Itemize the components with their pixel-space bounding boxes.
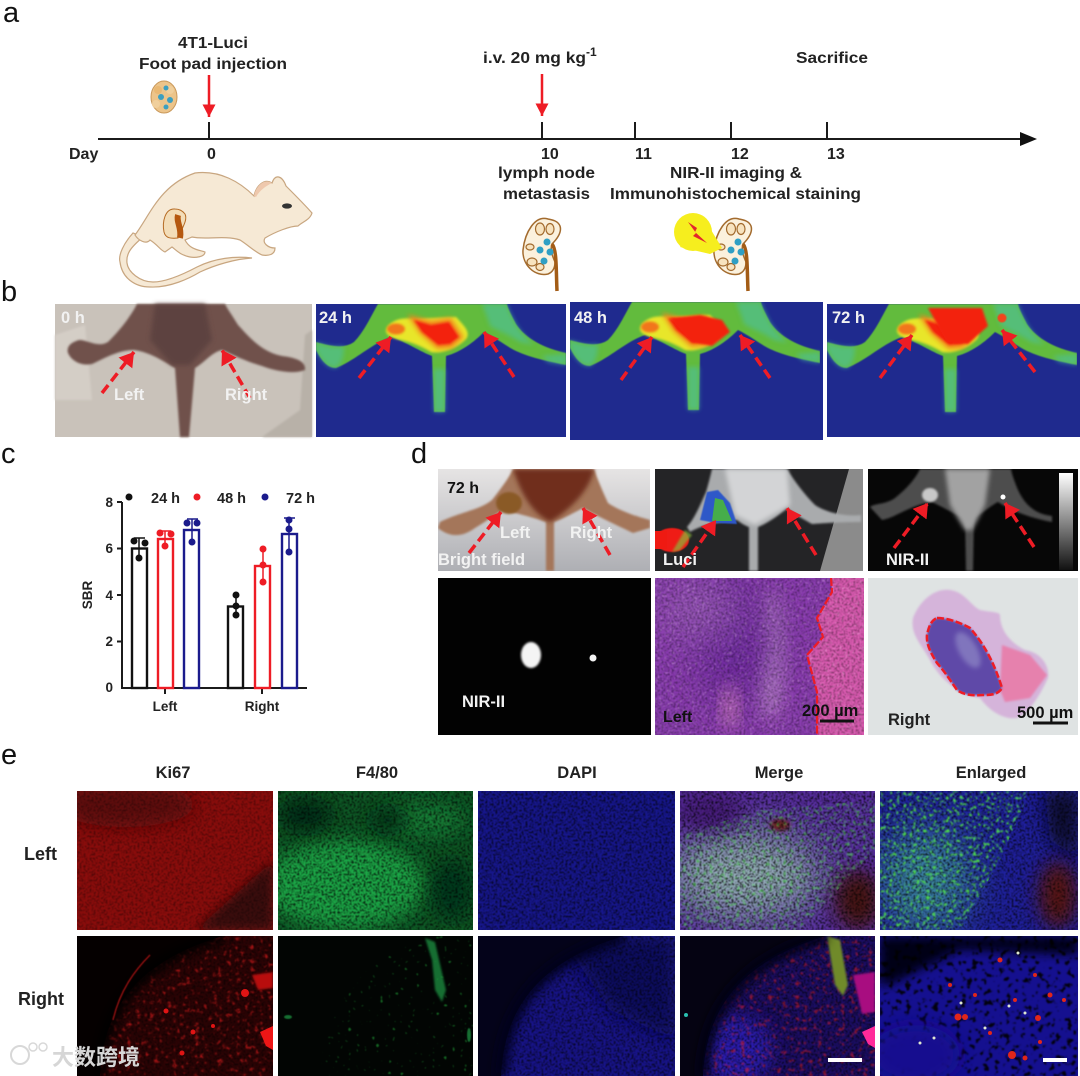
column headings: Enlarged — [956, 764, 1026, 782]
scale bar 200 um: 200 µm — [802, 702, 858, 720]
label: lymph node metastasis: lymph node — [498, 165, 595, 182]
legend: 48 h — [217, 491, 246, 507]
image: NIR-II lower — [438, 578, 651, 735]
image: Right F4/80 — [278, 936, 473, 1076]
watermark — [11, 1043, 140, 1070]
image: Left Enlarged — [880, 791, 1078, 930]
data points — [130, 516, 292, 618]
axis labels: 8 — [105, 495, 113, 510]
watermark: 大数跨境 — [52, 1045, 140, 1070]
panel c: SBR bar chart — [1, 438, 315, 714]
legend: 24 h — [151, 491, 180, 507]
legend — [126, 491, 315, 507]
icon: NIR-II light on lymph node — [674, 213, 752, 291]
NIR-II arrows — [894, 503, 1034, 548]
column headings — [156, 764, 1026, 782]
H&E right label: Right — [888, 711, 931, 729]
label: injection — [139, 35, 287, 73]
image: Left Merge — [670, 791, 882, 930]
NIR-II label: NIR-II — [886, 551, 929, 569]
image: Left DAPI — [478, 791, 675, 930]
day labels: 11 — [635, 146, 652, 163]
24 h arrows — [359, 332, 514, 378]
panel letter b: b — [1, 276, 17, 308]
image: Right Ki67 — [77, 936, 273, 1076]
panel a: experimental timeline — [3, 0, 1037, 291]
0 h arrows — [102, 350, 250, 398]
column headings: F4/80 — [356, 764, 398, 782]
timeline axis — [98, 122, 1037, 146]
scale bar — [828, 1058, 862, 1062]
label: lymph node metastasis — [498, 165, 595, 203]
label: imaging and staining — [610, 165, 861, 203]
axis labels: Left — [153, 699, 178, 714]
label: injection: 4T1-Luci — [178, 35, 248, 52]
label: intravenous dose — [483, 45, 597, 67]
column headings: Ki67 — [156, 764, 190, 782]
label: intravenous dose: -1 — [586, 45, 597, 59]
image: Right Merge — [680, 936, 875, 1076]
image: 24 h thermal map — [316, 304, 566, 437]
panel e: immunofluorescence grid — [1, 739, 1078, 1076]
NIR-II colour scale — [1059, 473, 1073, 570]
axis labels: 0 — [105, 680, 113, 695]
day labels: 10 — [541, 146, 559, 163]
image: 72 h thermal map — [827, 304, 1080, 437]
label: injection: Foot pad injection — [139, 56, 287, 73]
panel letter e: e — [1, 739, 17, 771]
72 h arrows — [880, 330, 1035, 378]
axes — [117, 502, 307, 694]
label: lymph node metastasis: metastasis — [503, 186, 590, 203]
image: Left F4/80 — [265, 791, 473, 930]
bars — [132, 530, 297, 688]
bright field labels: Right — [570, 524, 613, 542]
legend: 72 h — [286, 491, 315, 507]
image: Right DAPI — [478, 936, 675, 1076]
day labels — [69, 146, 845, 163]
column headings: Merge — [755, 764, 803, 782]
image: Right Enlarged — [870, 936, 1078, 1076]
icon: metastatic lymph node — [523, 218, 561, 291]
image: Left Ki67 — [77, 791, 273, 930]
bright field labels: Bright field — [438, 551, 525, 569]
axis labels: Right — [245, 699, 280, 714]
image: 0 h bright field — [55, 304, 312, 437]
bright field arrows — [469, 508, 610, 555]
bright field labels: 72 h — [447, 480, 479, 497]
0 h labels: 0 h — [61, 309, 85, 327]
scale bar — [1043, 1058, 1067, 1062]
icon: mouse — [120, 173, 312, 287]
day labels: Day — [69, 146, 98, 163]
H&E left label: Left — [663, 709, 693, 726]
axis labels: SBR — [80, 581, 95, 609]
icon: tumour cell cluster — [151, 81, 177, 113]
panel d: ex vivo imaging and histology — [411, 438, 1078, 735]
72 h label: 72 h — [832, 309, 865, 327]
image: H&E left — [655, 575, 864, 735]
error bars — [134, 518, 295, 616]
day labels: 12 — [731, 146, 749, 163]
day labels: 0 — [207, 146, 216, 163]
label: imaging and staining: NIR-II imaging & — [670, 165, 802, 182]
bright field labels — [438, 480, 613, 569]
Luci label: Luci — [663, 551, 697, 569]
axis labels: 6 — [105, 541, 113, 556]
axis labels: 2 — [105, 634, 113, 649]
image: bright field 72 h — [438, 469, 650, 571]
0 h labels: Left — [114, 386, 145, 404]
image: NIR-II top — [868, 469, 1078, 571]
image: Luci bioluminescence — [655, 469, 863, 571]
48 h arrows — [621, 335, 770, 380]
panel letter c: c — [1, 438, 16, 470]
24 h label: 24 h — [319, 309, 352, 327]
day labels: 13 — [827, 146, 845, 163]
row heading right: Right — [18, 989, 64, 1009]
panel letter d: d — [411, 438, 427, 470]
injection arrow — [208, 75, 210, 117]
bright field labels: Left — [500, 524, 531, 542]
dose arrow — [541, 74, 543, 116]
0 h labels: Right — [225, 386, 268, 404]
label: sacrifice: Sacrifice — [796, 50, 868, 67]
axis labels — [80, 495, 280, 714]
row heading left: Left — [24, 844, 57, 864]
scale bar 500 um: 500 µm — [1017, 704, 1073, 722]
column headings: DAPI — [557, 764, 597, 782]
label: imaging and staining: Immunohistochemical staining — [610, 186, 861, 203]
image: H&E right — [868, 578, 1078, 735]
panel b: time series imaging — [1, 276, 1080, 440]
48 h label: 48 h — [574, 309, 607, 327]
label: intravenous dose: i.v. 20 mg kg — [483, 50, 586, 67]
0 h labels — [61, 309, 268, 404]
Luci arrows — [683, 508, 816, 567]
image: 48 h thermal map — [570, 302, 823, 440]
axis labels: 4 — [105, 588, 113, 603]
image: NIR-II lower: NIR-II — [462, 693, 505, 711]
